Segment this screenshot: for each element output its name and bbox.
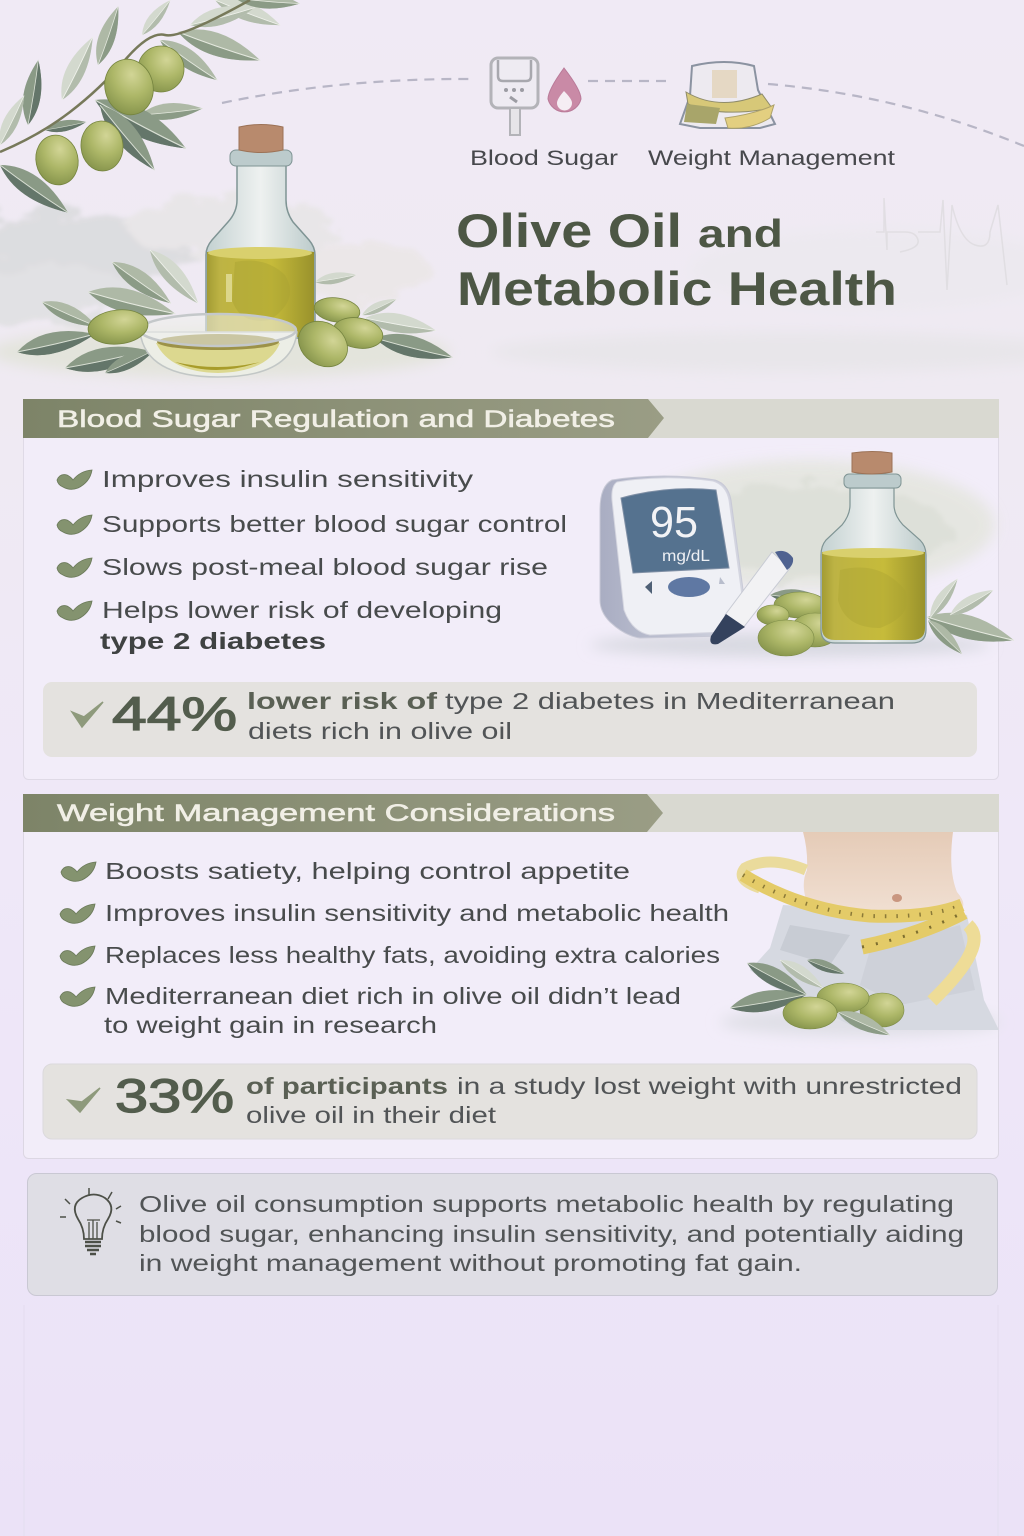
- stat box: 33%: 33%: [115, 1069, 234, 1122]
- check bullets: [60, 862, 96, 1006]
- bullet text: Mediterranean diet rich in olive oil didn’t lead: [105, 983, 681, 1009]
- icon: light bulb: [60, 1188, 121, 1254]
- bullet text: Improves insulin sensitivity and metabolic health: [105, 900, 729, 926]
- section heading band: Weight Management Considerations: [57, 800, 615, 827]
- bullet text: Replaces less healthy fats, avoiding extra calories: [105, 942, 720, 968]
- title: [456, 204, 897, 315]
- dashed connector lines: [222, 79, 1024, 146]
- illustration: glucose meter: 95: [650, 498, 698, 547]
- illustration: olive branch: [0, 0, 301, 221]
- section heading band: Blood Sugar Regulation and Diabetes: [57, 406, 615, 433]
- stat box: 44%: 44%: [112, 687, 237, 740]
- bullet text: to weight gain in research: [104, 1012, 437, 1038]
- bullet text: Slows post-meal blood sugar rise: [102, 554, 548, 580]
- bullet text: Improves insulin sensitivity: [102, 466, 473, 492]
- stat box: 44%: type 2 diabetes in Mediterranean: [445, 688, 895, 714]
- bullet text: [104, 858, 729, 1038]
- stat box: 44%: diets rich in olive oil: [248, 718, 512, 744]
- stat box: 33%: olive oil in their diet: [246, 1102, 497, 1128]
- summary text: Olive oil consumption supports metabolic health by regulating: [139, 1191, 954, 1217]
- panel: blood sugar regulation: [23, 399, 1017, 780]
- bullet text: Boosts satiety, helping control appetite: [105, 858, 630, 884]
- label: Weight Management: Weight Management: [648, 147, 895, 170]
- title: and: [698, 213, 783, 256]
- illustration: leaves under bottle: [14, 243, 455, 379]
- section heading band: [23, 399, 999, 438]
- illustration: glucose meter: [600, 476, 793, 644]
- bowl of oil: [140, 314, 297, 377]
- bullet text: type 2 diabetes: [100, 628, 326, 654]
- stat box: 44%: lower risk of: [247, 688, 437, 714]
- bullet text: [100, 466, 567, 654]
- olives on branch: [31, 46, 184, 189]
- summary text: [139, 1191, 964, 1276]
- callout: summary: [28, 1174, 998, 1296]
- stat box: 33%: in a study lost weight with unrestricted: [457, 1073, 962, 1099]
- olives around bottle: [86, 295, 385, 376]
- illustration: waist with tape measure: [728, 832, 999, 1041]
- panel: weight management: [23, 794, 1000, 1158]
- illustration: leaves and olives: [757, 575, 1017, 658]
- faint lower panel outline: [24, 1305, 998, 1536]
- icon: waist with tape measure: [680, 62, 775, 128]
- summary text: blood sugar, enhancing insulin sensitivity, and potentially aiding: [139, 1221, 964, 1247]
- stat box: 33%: [43, 1064, 977, 1139]
- summary text: in weight management without promoting fat gain.: [139, 1250, 802, 1276]
- illustration: glucose meter: mg/dL: [662, 548, 710, 565]
- title: Metabolic Health: [457, 262, 897, 315]
- bullet text: Helps lower risk of developing: [102, 597, 502, 623]
- check bullets: [57, 470, 92, 620]
- illustration: small oil bottle: [821, 452, 926, 643]
- label: Blood Sugar: Blood Sugar: [470, 147, 618, 170]
- title: Olive Oil: [456, 204, 682, 257]
- illustration: olive oil bottle: [86, 124, 385, 377]
- background watercolor wash: [0, 197, 1024, 378]
- panel wash: [590, 460, 995, 657]
- icon: glucose meter and blood drop: [491, 58, 581, 135]
- stat box: 33%: of participants: [246, 1073, 448, 1099]
- stat box: 44%: [43, 682, 977, 757]
- section heading band: [23, 794, 999, 832]
- decorative ECG trace: [876, 198, 1007, 290]
- bullet text: Supports better blood sugar control: [102, 511, 567, 537]
